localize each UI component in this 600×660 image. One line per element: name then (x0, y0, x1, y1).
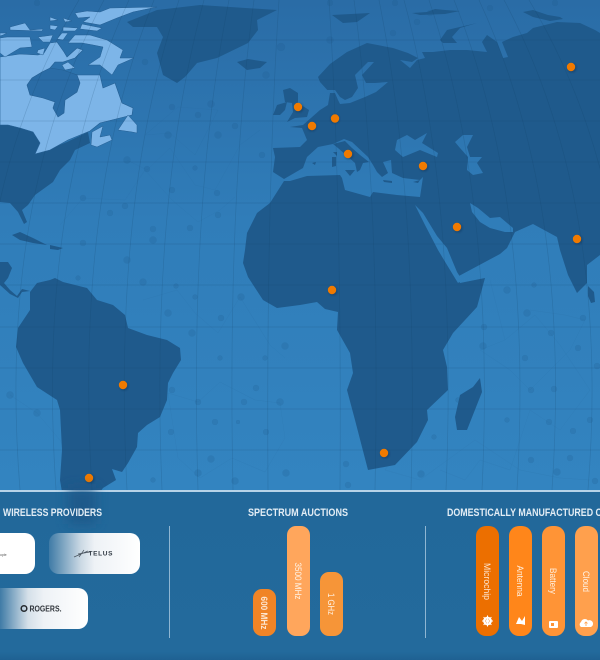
bar: battery: Battery (547, 568, 558, 594)
Italy and Mediterranean islands (312, 141, 420, 183)
bar: microchip: Microchip (481, 563, 492, 600)
Newfoundland and Nova Scotia (91, 115, 137, 147)
Sri Lanka and Madagascar (455, 286, 595, 430)
bar: cloud: Cloud (580, 571, 591, 592)
card: Telus (49, 533, 140, 574)
card: Telus: TELUS (88, 550, 113, 558)
bar: antenna (509, 526, 532, 636)
Central America (0, 262, 30, 298)
section: wireless providers (0, 507, 140, 629)
card: Rogers: ROGERS. (30, 604, 62, 614)
Greenland (127, 5, 277, 83)
South America (16, 278, 181, 492)
grid lines (0, 0, 600, 490)
landmasses (0, 5, 600, 492)
Hudson Bay (27, 68, 80, 117)
bottom panel (0, 488, 600, 660)
icon: battery (549, 621, 558, 628)
heading: wireless providers: WIRELESS PROVIDERS (3, 507, 102, 519)
Svalbard and Arctic islands (332, 9, 563, 43)
Baltic Sea (326, 62, 388, 104)
divider (425, 526, 426, 638)
Persian Gulf (470, 203, 513, 232)
bar: battery (542, 526, 565, 636)
bar: 3500 MHz: 3500 MHz (292, 562, 303, 600)
Black Sea (395, 133, 438, 157)
icon: antenna dish (516, 616, 525, 625)
section: domestically manufactured components (447, 507, 600, 636)
icon: cloud (580, 619, 593, 627)
United Kingdom and Ireland (273, 88, 309, 122)
icon: gear (482, 616, 493, 626)
bar: cloud (575, 526, 598, 636)
card: partial provider (0, 533, 35, 574)
card: Rogers (0, 588, 88, 629)
ocean background (0, 0, 600, 492)
Caribbean islands (12, 232, 63, 250)
Mediterranean Sea (284, 139, 423, 197)
bar: microchip (476, 526, 499, 636)
marker dots (85, 63, 581, 482)
bar: 1 GHz: 1 GHz (325, 593, 336, 615)
blurred map shadow (68, 488, 96, 524)
Red Sea (415, 205, 462, 283)
North America (0, 125, 90, 224)
bar: 600 MHz: 600 MHz (258, 596, 269, 630)
Caspian Sea (455, 135, 483, 175)
divider (169, 526, 170, 638)
card: partial provider: ople (0, 553, 7, 557)
panel top border (0, 490, 600, 492)
Arctic Canada islands (0, 7, 157, 75)
Eurasia and Africa (243, 22, 600, 470)
location markers (85, 63, 582, 483)
bar: antenna: Antenna (514, 566, 525, 597)
Canada (0, 42, 133, 154)
network pattern (6, 0, 600, 500)
Iceland (237, 59, 267, 70)
section: spectrum auctions (248, 507, 348, 636)
heading: spectrum auctions: SPECTRUM AUCTIONS (248, 507, 348, 519)
